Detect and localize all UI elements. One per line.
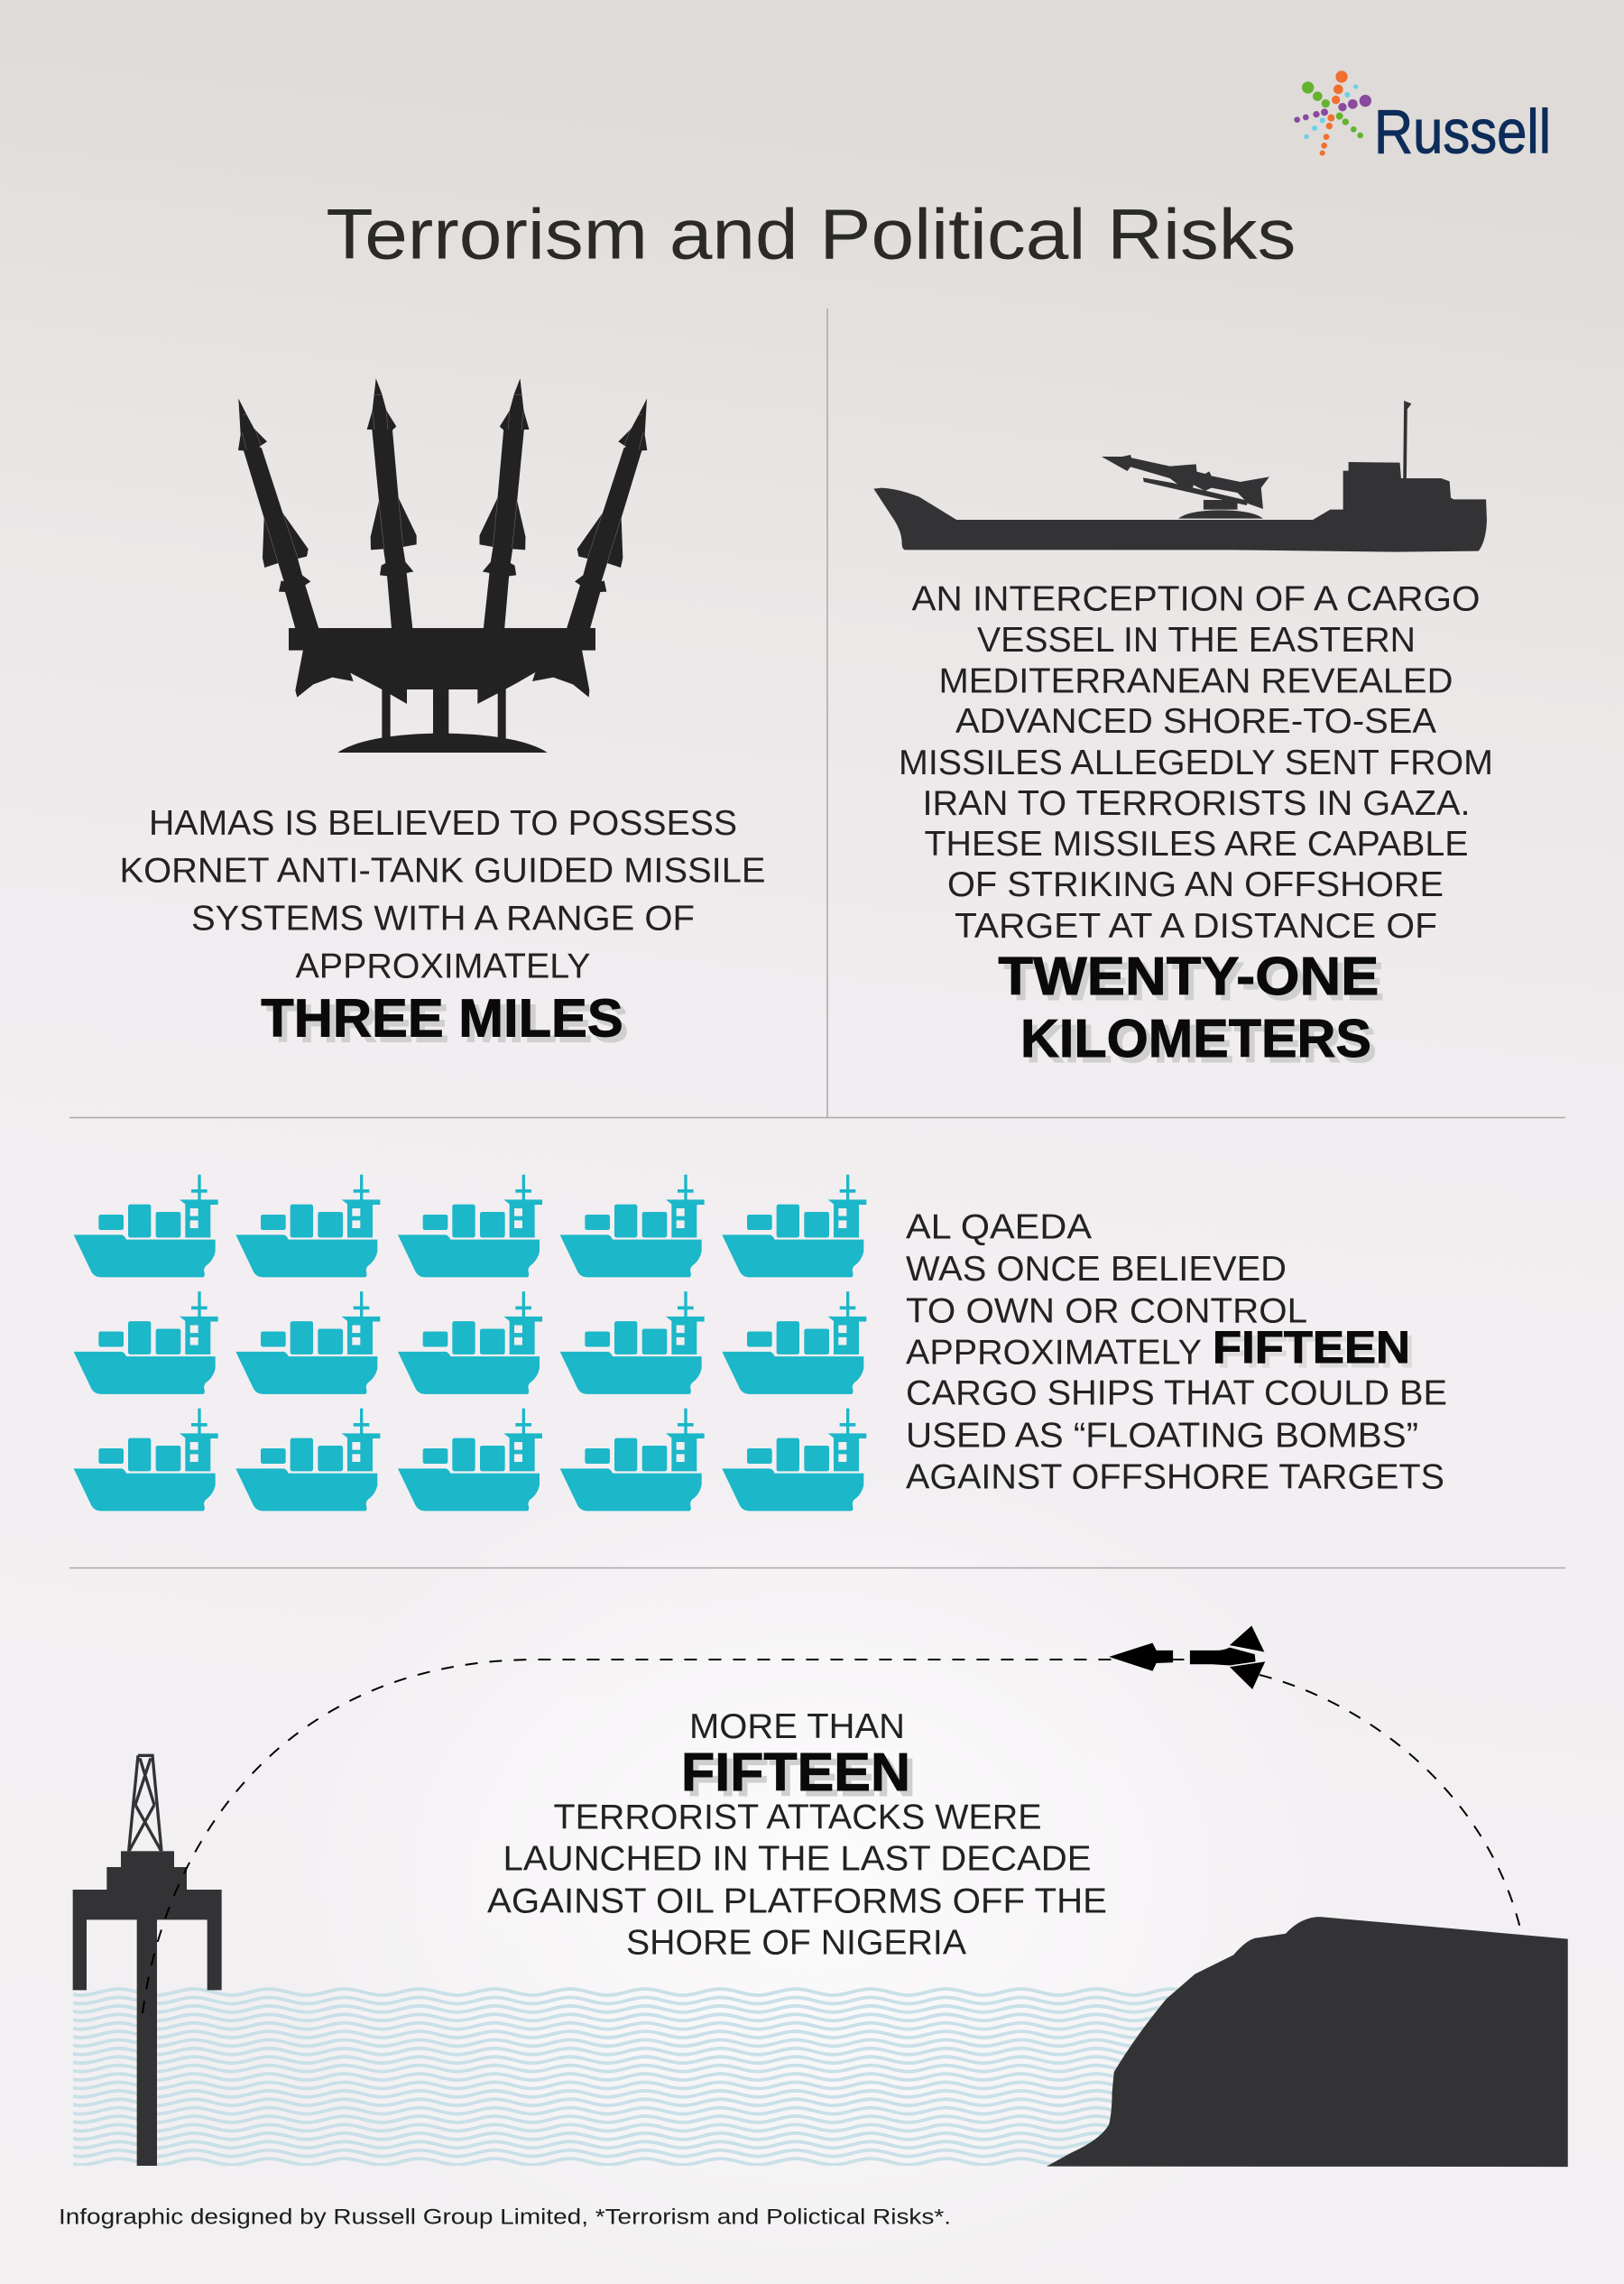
- highlight: three miles: THREE MILES: [261, 988, 623, 1048]
- highlight: fifteen ships: FIFTEEN: [1213, 1322, 1410, 1373]
- text: interception statement: OF STRIKING AN OFFSHORE: [947, 865, 1444, 904]
- icon: cargo ship: [74, 1291, 218, 1394]
- icon: coastline: [1047, 1917, 1568, 2167]
- footer credit: Infographic designed by Russell Group Limited, *Terrorism and Polictical Risks*.: [59, 2205, 951, 2229]
- water waves: [73, 1987, 1179, 2166]
- text: interception statement: MISSILES ALLEGEDLY SENT FROM: [899, 744, 1493, 782]
- icon: cargo ship: [560, 1175, 705, 1277]
- icon: cargo ship: [74, 1409, 218, 1511]
- text: interception statement: THESE MISSILES ARE CAPABLE: [924, 825, 1469, 864]
- text: Hamas statement: SYSTEMS WITH A RANGE OF: [191, 900, 695, 939]
- text: Al Qaeda statement: AGAINST OFFSHORE TARGETS: [906, 1457, 1444, 1496]
- title: Terrorism and Political Risks: [326, 195, 1296, 274]
- icon: cargo ship: [398, 1175, 542, 1277]
- logo mark: coloured dots: [1294, 70, 1371, 156]
- arrow: missile flight path: [143, 1660, 1521, 2013]
- panel: Al Qaeda fleet: [74, 1175, 1447, 1511]
- text: Hamas statement: HAMAS IS BELIEVED TO POSSESS: [149, 804, 737, 843]
- text: Al Qaeda statement: TO OWN OR CONTROL: [906, 1291, 1307, 1330]
- text: interception statement: VESSEL IN THE EASTERN: [977, 621, 1416, 660]
- text: Nigeria statement: AGAINST OIL PLATFORMS OFF THE: [487, 1882, 1107, 1920]
- text: Nigeria statement: [487, 1707, 1107, 1962]
- panel: cargo vessel interception: [873, 401, 1493, 1068]
- text: Nigeria statement: TERRORIST ATTACKS WERE: [554, 1799, 1041, 1837]
- icon: cargo ship: [235, 1291, 380, 1394]
- icon: cargo ship: [560, 1291, 705, 1394]
- icon: cargo ship: [722, 1175, 866, 1277]
- icon: cargo ship: [235, 1175, 380, 1277]
- icon: oil platform: [73, 1755, 222, 2166]
- highlight: twenty-one kilometers: TWENTY-ONE: [998, 947, 1379, 1006]
- highlight: twenty-one kilometers: [998, 947, 1379, 1068]
- icon: missile in flight: [1109, 1626, 1265, 1689]
- text: Al Qaeda statement: AL QAEDA: [906, 1208, 1092, 1247]
- logo wordmark: Russell: [1374, 97, 1551, 166]
- text: interception statement: IRAN TO TERRORISTS IN GAZA.: [922, 784, 1471, 823]
- text: interception statement: AN INTERCEPTION OF A CARGO: [911, 579, 1480, 618]
- text: Hamas statement: APPROXIMATELY: [296, 947, 591, 985]
- text: interception statement: TARGET AT A DISTANCE OF: [955, 907, 1437, 946]
- icon: missile launcher: [238, 378, 647, 753]
- icon: cargo ship: [560, 1409, 705, 1511]
- icon: cargo ship: [722, 1291, 866, 1394]
- text: Nigeria statement: MORE THAN: [689, 1707, 905, 1746]
- highlight: twenty-one kilometers: KILOMETERS: [1020, 1009, 1371, 1068]
- text: Nigeria statement: LAUNCHED IN THE LAST DECADE: [503, 1840, 1092, 1879]
- text: interception statement: MEDITERRANEAN REVEALED: [938, 662, 1453, 700]
- text: Al Qaeda statement: CARGO SHIPS THAT COULD BE: [906, 1374, 1447, 1413]
- dividers: [69, 309, 1565, 1568]
- text: Hamas statement: [119, 804, 765, 985]
- text: Hamas statement: KORNET ANTI-TANK GUIDED MISSILE: [119, 852, 765, 891]
- panel: Nigeria offshore attacks: [43, 1626, 1568, 2167]
- icon: cargo ship: [74, 1175, 218, 1277]
- panel: Hamas missiles: [119, 378, 765, 1048]
- icon: cargo ship: [398, 1291, 542, 1394]
- text: Al Qaeda statement: WAS ONCE BELIEVED: [906, 1250, 1287, 1289]
- text: Al Qaeda statement: USED AS “FLOATING BOMBS”: [906, 1416, 1418, 1455]
- highlight: fifteen attacks: FIFTEEN: [681, 1743, 910, 1802]
- text: Al Qaeda statement: APPROXIMATELY: [906, 1334, 1202, 1373]
- icon: cargo ship carrying missile: [873, 401, 1487, 552]
- logo: Russell: [1294, 70, 1551, 166]
- text: Al Qaeda statement: [906, 1208, 1447, 1496]
- text: Nigeria statement: SHORE OF NIGERIA: [626, 1923, 966, 1962]
- text: interception statement: [899, 579, 1493, 946]
- pictogram: fifteen cargo ships: [74, 1175, 866, 1511]
- icon: cargo ship: [235, 1409, 380, 1511]
- icon: cargo ship: [398, 1409, 542, 1511]
- text: interception statement: ADVANCED SHORE-TO-SEA: [955, 702, 1436, 741]
- icon: cargo ship: [722, 1409, 866, 1511]
